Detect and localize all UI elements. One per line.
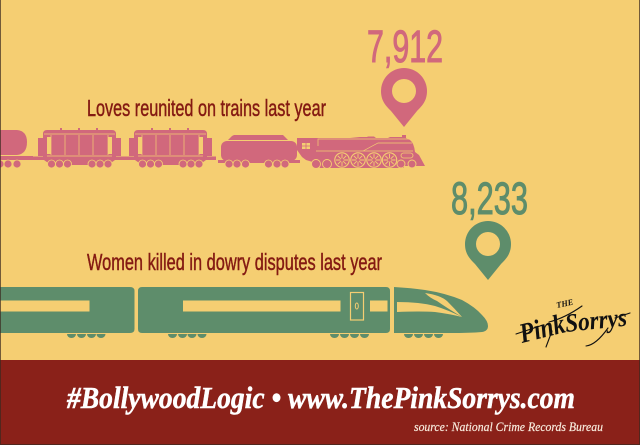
- heading: women killed: Women killed in dowry disputes last year: [87, 249, 382, 275]
- middle carriage: [138, 287, 390, 338]
- logo: The Pink Sorrys: Sorrys: [564, 303, 628, 338]
- footer band: [0, 360, 640, 445]
- logo: The Pink Sorrys: THE: [555, 297, 574, 310]
- number: 7,912: 7,912: [367, 21, 443, 72]
- heading: loves reunited: Loves reunited on trains last year: [87, 95, 326, 121]
- rear carriage: [0, 287, 134, 338]
- source note: source: National Crime Records Bureau: [414, 419, 603, 434]
- nose carriage: [394, 287, 488, 338]
- footer hashtag and url: #BollywoodLogic • www.ThePinkSorrys.com: [66, 380, 575, 415]
- steam locomotive: [297, 135, 425, 168]
- tanker wagon: [0, 130, 33, 168]
- box wagon 2: [124, 128, 216, 168]
- icon: pink map pin: [381, 68, 427, 127]
- box wagon 1: [33, 128, 125, 168]
- logo: The Pink Sorrys: Pink: [515, 309, 568, 350]
- hopper wagon: [218, 135, 300, 168]
- pink steam train: [0, 128, 425, 168]
- icon: green map pin: [465, 221, 511, 280]
- number: 8,233: 8,233: [451, 173, 528, 224]
- logo: The Pink Sorrys: [515, 297, 630, 350]
- green bullet train: [0, 287, 488, 338]
